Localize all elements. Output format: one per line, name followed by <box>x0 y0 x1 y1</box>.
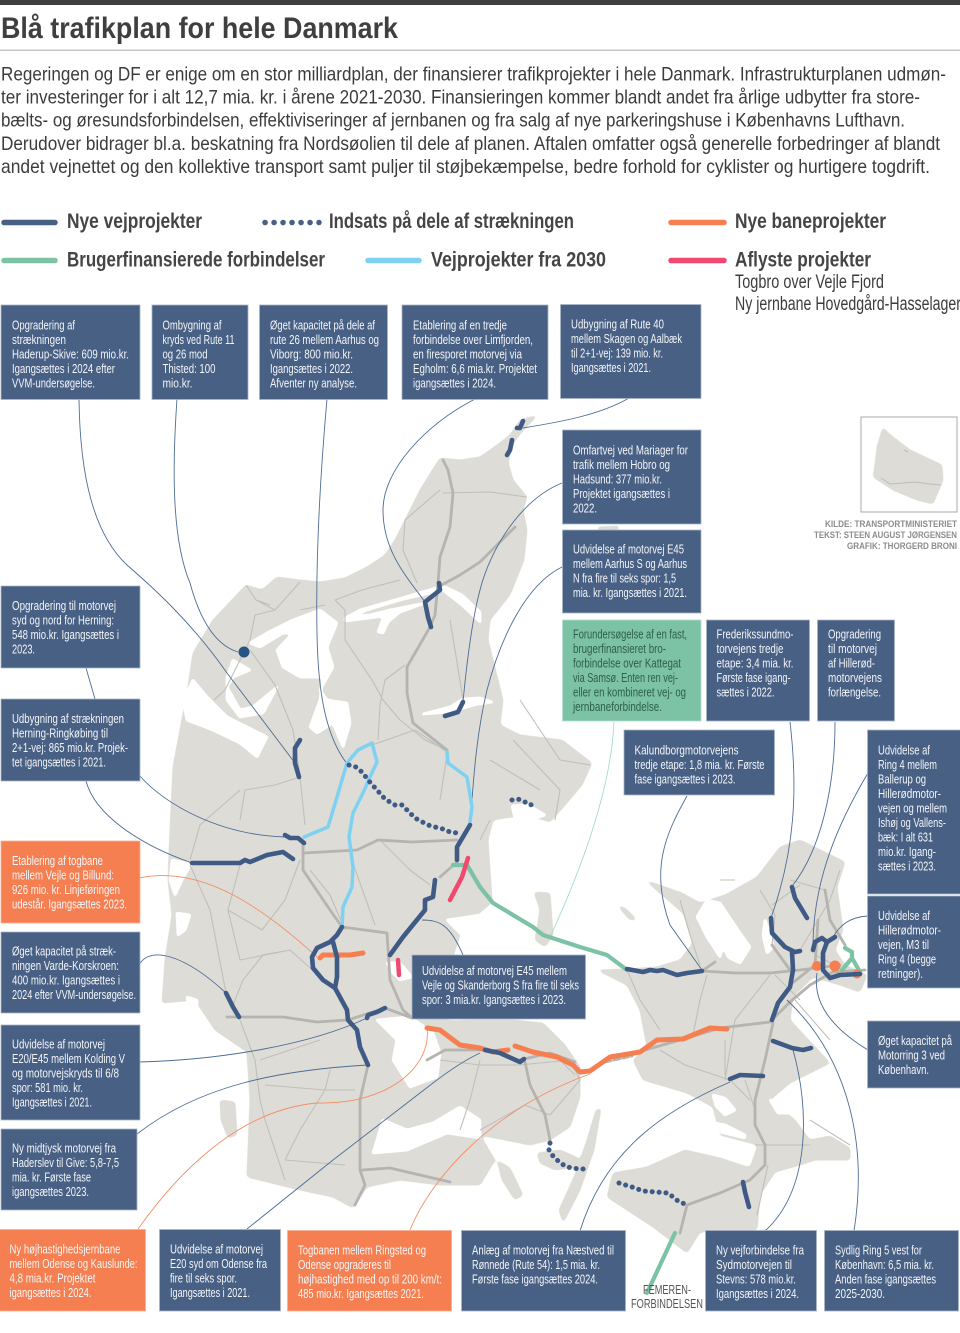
callout: Haderup-Skive: VVM-undersøgelse. <box>12 376 95 390</box>
callout: Ringsted-Odense rail: 485 mio.kr. Igangsættes 2021. <box>298 1286 424 1301</box>
callout: Limfjorden: en firesporet motorvej via <box>413 346 522 362</box>
callout: Stevns <box>706 1230 816 1311</box>
connector lines <box>79 398 868 1231</box>
callout: Haderup-Skive: Haderup-Skive: 609 mio.kr. <box>12 346 129 362</box>
routes: new road projects <box>192 421 860 1207</box>
callout: Rute 11 og 26: kryds ved Rute 11 <box>162 332 234 347</box>
legend <box>4 210 960 315</box>
callout: Mariager: Omfartvej ved Mariager for <box>573 442 688 458</box>
callout: Limfjorden <box>402 305 548 400</box>
callout: Frederikssundmotorvejen: sættes i 2022. <box>716 684 774 700</box>
callout: Kattegat fixed link: eller en kombineret vej- og <box>573 684 686 700</box>
callout: Rute 11 og 26 <box>152 305 248 400</box>
callout: Limfjorden: igangsættes i 2024. <box>413 376 496 390</box>
land: Zealand <box>597 840 867 1253</box>
callout: Odense-Kauslunde rail: igangsættes i 2024. <box>10 1285 92 1300</box>
callout: Rute 40: Udbygning af Rute 40 <box>571 316 664 332</box>
callout: Mariager: 2022. <box>573 500 597 516</box>
land: Jutland <box>162 415 592 1208</box>
top bar <box>0 0 960 5</box>
callout: Rute 40: Igangsættes i 2021. <box>571 360 651 375</box>
land: Langeland <box>559 1108 601 1223</box>
callout: Rute 11 og 26: Thisted: 100 <box>162 361 216 376</box>
callout: Herning-Ringkøbing: 2+1-vej: 865 mio.kr. Projek- <box>12 740 128 755</box>
legend: nye baneprojekter: Nye baneprojekter <box>735 210 886 233</box>
callout: Midtjysk motorvej: Ny midtjysk motorvej fra <box>12 1140 116 1156</box>
callout: E20/E45 Kolding: Udvidelse af motorvej <box>12 1036 105 1052</box>
callout: Kalundborgmotorvejen: Kalundborgmotorvejens <box>634 742 739 758</box>
callout: Haderup-Skive <box>1 305 140 400</box>
callout: Limfjorden: Egholm: 6,6 mia.kr. Projektet <box>413 361 537 376</box>
legend: vejprojekter fra 2030: Vejprojekter fra 2030 <box>431 248 606 272</box>
callout: E45 Vejle-Skanderborg: spor: 3 mia.kr. Igangsættes i 2023. <box>422 992 566 1007</box>
callout: Kattegat fixed link <box>562 620 701 721</box>
callout: Mariager: trafik mellem Hobro og <box>573 457 670 472</box>
callout: Frederikssundmotorvejen: Frederikssundmo- <box>716 626 794 642</box>
callout: E20/E45 Kolding <box>1 1025 140 1120</box>
callout: Odense-Kauslunde rail: 4,8 mia.kr. Projektet <box>10 1270 96 1286</box>
legend: brugerfinansierede forbindelser: Brugerfinansierede forbindelser <box>67 248 325 272</box>
legend: indsats på dele af strækningen: Indsats på dele af strækningen <box>329 210 574 233</box>
callout: Herning motorway: 2023. <box>12 642 35 656</box>
callout: Ringsted-Odense rail: Odense opgraderes til <box>298 1257 391 1272</box>
callout: Varde-Korskroen: 400 mio.kr. Igangsættes i <box>12 972 120 988</box>
icon: Thisted junction marker <box>238 646 250 658</box>
land masses <box>162 415 867 1253</box>
callout: E45 Aarhus: mellem Aarhus S og Aarhus <box>573 556 687 571</box>
callout: Sydlig Ring 5: Sydlig Ring 5 vest for <box>835 1242 922 1258</box>
callout: Vejle-Billund rail: Etablering af togbane <box>12 853 103 868</box>
callout: Haderup-Skive: Opgradering af <box>12 318 75 332</box>
callout: Odense-Kauslunde rail: Ny højhastighedsjernbane <box>10 1242 120 1256</box>
callout: Limfjorden: Etablering af en tredje <box>413 318 507 332</box>
callout: Kalundborgmotorvejen <box>624 730 774 795</box>
callout: Herning-Ringkøbing: tet igangsættes i 2021. <box>12 754 106 770</box>
callout: Hillerød M3: vejen, M3 til <box>878 937 929 952</box>
callout: Hillerød M3: Hillerødmotor- <box>878 922 941 938</box>
callout: E20 Odense: Udvidelse af motorvej <box>170 1242 263 1256</box>
callout: E45 Aarhus: N fra fire til seks spor: 1,5 <box>573 570 676 586</box>
routes: light blue 2030 road projects <box>304 743 472 927</box>
legend: nye vejprojekter: Nye vejprojekter <box>67 210 202 233</box>
intro text <box>1 64 946 178</box>
callout: E20/E45 Kolding: og motorvejskryds til 6/8 <box>12 1066 119 1080</box>
callout: Hillerød extension: forlængelse. <box>828 684 881 700</box>
callout: Vejle-Billund rail: udestår. Igangsættes 2023. <box>12 896 127 912</box>
callout: Herning motorway: 548 mio.kr. Igangsættes i <box>12 627 119 642</box>
land: Funen <box>425 1020 580 1145</box>
callout: Ring 4: Hillerødmotor- <box>878 786 941 801</box>
callout: Limfjorden: forbindelse over Limfjorden, <box>413 332 533 347</box>
callout: Midtjysk motorvej <box>1 1129 137 1210</box>
callout: Odense-Kauslunde rail: mellem Odense og Kauslunde: <box>10 1256 138 1271</box>
callout: E45 Aarhus: Udvidelse af motorvej E45 <box>573 542 684 556</box>
callout: Herning motorway: Opgradering til motorvej <box>12 598 116 613</box>
callout: Rute 40: til 2+1-vej: 139 mio. kr. <box>571 346 663 360</box>
callout: Rute 11 og 26: Ombygning af <box>162 318 222 332</box>
callout: Kattegat fixed link: Forundersøgelse af en fast, <box>573 626 687 642</box>
callout: Ring 4: bæk: I alt 631 <box>878 830 933 844</box>
routes: cancelled projects <box>398 858 468 975</box>
minor roads <box>190 490 850 1215</box>
callout: Hillerød M3 <box>868 896 960 988</box>
callout: Varde-Korskroen <box>1 932 140 1013</box>
callout: E20 Odense <box>160 1230 280 1311</box>
callout: Stevns: Sydmotorvejen til <box>716 1257 792 1272</box>
callout: Rute 26: Viborg: 800 mio.kr. <box>270 346 353 362</box>
callout: E45 Vejle-Skanderborg: Vejle og Skanderborg S fra fire til seks <box>422 978 579 992</box>
routes: green user-financed links <box>453 865 860 1293</box>
callout: Rute 26 <box>260 305 388 400</box>
callout: E20 Odense: Igangsættes i 2021. <box>170 1285 250 1300</box>
callout: Frederikssundmotorvejen <box>706 620 810 721</box>
callout: Odense-Kauslunde rail <box>0 1230 146 1311</box>
callout: Kattegat fixed link: jernbaneforbindelse. <box>572 699 662 714</box>
callout: E20 Odense: fire til seks spor. <box>170 1270 237 1286</box>
callout: Ring 4: sættes i 2023. <box>878 858 936 874</box>
routes: partial upgrades dotted <box>349 765 687 1208</box>
callout: E20/E45 Kolding: spor: 581 mio. kr. <box>12 1080 83 1095</box>
callout: Herning-Ringkøbing: Herning-Ringkøbing til <box>12 726 108 740</box>
callout: E20/E45 Kolding: E20/E45 mellem Kolding V <box>12 1051 125 1066</box>
callout: Sydlig Ring 5: 2025-2030. <box>835 1286 885 1301</box>
legend: aflyste projekter <box>671 248 960 315</box>
callout: Vejle-Billund rail <box>1 841 140 923</box>
credits <box>814 519 958 551</box>
callout: Næstved-Rønnede: Første fase igangsættes 2024. <box>472 1272 598 1286</box>
callout: Stevns: Ny vejforbindelse fra <box>716 1242 804 1258</box>
callout: Stevns: Igangsættes i 2024. <box>716 1286 799 1301</box>
major roads <box>227 460 865 1233</box>
callout: Varde-Korskroen: ningen Varde-Korskroen: <box>12 958 119 973</box>
routes: new rail projects <box>320 953 862 1072</box>
callout: Vejle-Billund rail: 926 mio. kr. Linjeføringen <box>12 882 120 897</box>
callout: Rute 40 <box>560 304 701 398</box>
map of Denmark <box>79 398 868 1311</box>
callout: Rute 26: Igangsættes i 2022. <box>270 361 353 376</box>
label: Femern link: FEMEREN- <box>643 1282 691 1297</box>
callout: Ring 4: Ring 4 mellem <box>878 757 937 772</box>
callout: Varde-Korskroen: Øget kapacitet på stræk- <box>12 944 116 958</box>
callout: Varde-Korskroen: 2024 efter VVM-undersøgelse. <box>12 987 136 1002</box>
callout: Rute 26: Øget kapacitet på dele af <box>270 318 375 332</box>
callout: Haderup-Skive: Igangsættes i 2024 efter <box>12 361 115 376</box>
callout: Herning-Ringkøbing <box>1 699 140 781</box>
inset map: Bornholm <box>861 417 957 512</box>
callout: E20 Odense: E20 syd om Odense fra <box>170 1256 267 1271</box>
callout: Hillerød M3: Ring 4 (begge <box>878 952 936 966</box>
callout: Kattegat fixed link: via Samsø. Enten ren vej- <box>573 670 678 685</box>
callout: Hillerød M3: retninger). <box>878 966 923 981</box>
callout: Ring 4: Ballerup og <box>878 772 926 786</box>
callout: Herning-Ringkøbing: Udbygning af strækningen <box>12 711 124 726</box>
callout: Frederikssundmotorvejen: etape: 3,4 mia. kr. <box>716 656 794 670</box>
callout: Herning motorway: syd og nord for Herning: <box>12 612 114 628</box>
label: Femern link <box>631 1282 703 1311</box>
callout: Næstved-Rønnede: Anlæg af motorvej fra Næstved til <box>472 1242 614 1258</box>
callout: Mariager <box>562 430 701 524</box>
label: Femern link: FORBINDELSEN <box>631 1296 703 1311</box>
callout: E45 Aarhus <box>562 530 701 613</box>
callout: Herning motorway <box>1 586 140 668</box>
legend: aflyste projekter: Togbro over Vejle Fjord <box>735 272 884 293</box>
callout: Hillerød extension: af Hillerød- <box>828 656 875 670</box>
callout: Mariager: Projektet igangsættes i <box>573 486 670 501</box>
callout: Mariager: Hadsund: 377 mio.kr. <box>573 472 662 486</box>
callout: Rute 26: Afventer ny analyse. <box>270 376 357 390</box>
callout: Frederikssundmotorvejen: Første fase igang- <box>716 670 790 685</box>
callout: Haderup-Skive: strækningen <box>12 332 66 347</box>
callout: Ringsted-Odense rail: højhastighed med op til 200 km/t: <box>298 1272 442 1286</box>
callout: Kattegat fixed link: brugerfinansieret bro- <box>573 641 666 656</box>
callout: Hillerød M3: Udvidelse af <box>878 908 930 923</box>
callout: Ringsted-Odense rail <box>288 1230 452 1311</box>
callout: Kalundborgmotorvejen: tredje etape: 1,8 mia. kr. Første <box>634 757 764 772</box>
callout: Frederikssundmotorvejen: torvejens tredje <box>716 641 784 656</box>
callout: Kattegat fixed link: forbindelse over Kattegat <box>573 656 681 670</box>
callout: Hillerød extension: til motorvej <box>828 641 877 656</box>
callout: Midtjysk motorvej: igangsættes 2023. <box>12 1184 89 1199</box>
callout: Ring 4: Udvidelse af <box>878 742 930 758</box>
legend: aflyste projekter: Aflyste projekter <box>735 248 871 272</box>
callout: Motorring 3 <box>868 1021 960 1088</box>
callout: Rute 40: mellem Skagen og Aalbæk <box>571 331 682 346</box>
callout: Næstved-Rønnede <box>462 1230 626 1311</box>
callout: Midtjysk motorvej: Haderslev til Give: 5,8-7,5 <box>12 1155 119 1170</box>
callout: Vejle-Billund rail: mellem Vejle og Billund: <box>12 868 114 882</box>
callout: E45 Vejle-Skanderborg: Udvidelse af motorvej E45 mellem <box>422 963 567 978</box>
callout: E45 Vejle-Skanderborg <box>412 955 586 1019</box>
callout: Rute 11 og 26: mio.kr. <box>162 376 192 390</box>
callout: Stevns: Stevns: 578 mio.kr. <box>716 1272 796 1286</box>
callout: Kalundborgmotorvejen: fase igangsættes i 2023. <box>634 772 736 786</box>
callout: Sydlig Ring 5 <box>824 1230 958 1311</box>
callout: Rute 11 og 26: og 26 mod <box>162 346 208 362</box>
land: small islands <box>220 526 850 1200</box>
callout: Midtjysk motorvej: mia. kr. Første fase <box>12 1170 91 1184</box>
callout: Næstved-Rønnede: Rønnede (Rute 54): 1,5 mia. kr. <box>472 1257 600 1272</box>
callout: Hillerød extension <box>818 620 894 721</box>
callout: Ring 4: mio.kr. Igang- <box>878 844 936 859</box>
callout: Motorring 3: København. <box>878 1062 929 1077</box>
callout: Ringsted-Odense rail: Togbanen mellem Ringsted og <box>298 1242 426 1258</box>
callout: E45 Aarhus: mia. kr. Igangsættes i 2021. <box>573 585 687 600</box>
callout: E20/E45 Kolding: Igangsættes i 2021. <box>12 1094 92 1110</box>
callout: Ring 4 <box>868 730 960 894</box>
title: Blå trafikplan for hele Danmark <box>1 12 398 45</box>
callout: Hillerød extension: Opgradering <box>828 626 881 642</box>
callout: Rute 26: rute 26 mellem Aarhus og <box>270 332 379 347</box>
callout: Hillerød extension: motorvejens <box>828 670 882 685</box>
fjords and water <box>170 586 790 1153</box>
